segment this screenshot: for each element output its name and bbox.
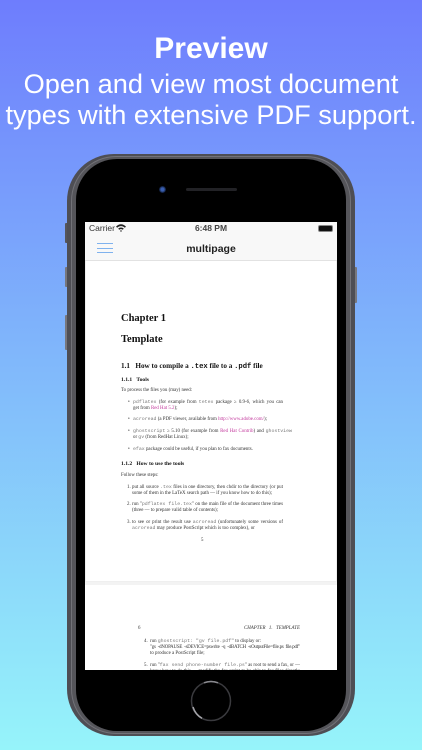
- tools intro: To process the files you (may) need:: [121, 388, 192, 393]
- steps list: to see or print the result use acroread (unfortunately some versions of: [132, 520, 283, 525]
- camera: [158, 186, 166, 192]
- page gap: [85, 582, 337, 585]
- time: 6:48 PM: [195, 223, 227, 233]
- tools list: •: [128, 447, 130, 452]
- icon: battery: [318, 225, 333, 232]
- steps continued: 5.: [144, 662, 148, 668]
- steps list: [127, 484, 283, 531]
- steps list: put all source .tex files in one directory, then chdir to the directory (or put: [132, 485, 283, 490]
- title: Preview: Preview: [154, 32, 268, 65]
- steps continued: 4.: [144, 638, 148, 644]
- tools list: get from Red Hat 5.2);: [133, 406, 177, 411]
- steps list: (three — to prepare valid table of contents);: [132, 508, 218, 513]
- tools list: or gv (from RedHat Linux);: [133, 435, 189, 440]
- section 1.1.2 heading: 1.1.2 How to use the tools: [121, 461, 184, 467]
- black bezel: [76, 159, 346, 731]
- steps list: 1.: [127, 485, 131, 490]
- tools list: efax package could be useful, if you plan to fax documents.: [133, 447, 253, 452]
- tools list: pdflatex (for example from tetex package ≥ 0.9-6, which you can: [133, 400, 283, 405]
- steps list: run "pdflatex file.tex" on the main file of the document three times: [132, 502, 283, 507]
- tools list: ghostscript ≥ 5.10 (for example from Red Hat Contrib) and ghostview: [133, 429, 292, 434]
- section 1.1 heading: 1.1 How to compile a .tex file to a .pdf file: [121, 362, 263, 371]
- template heading: Template: [121, 334, 163, 345]
- subtitle text: Open and view most document: [24, 68, 398, 99]
- chapter heading: Chapter 1: [121, 313, 166, 324]
- section 1.1.1 heading: 1.1.1 Tools: [121, 377, 149, 383]
- running header: CHAPTER 1. TEMPLATE: [244, 626, 300, 630]
- tools list: •: [128, 400, 130, 405]
- nav title: multipage: [186, 242, 236, 254]
- document page 1: [85, 260, 337, 582]
- home button: [190, 680, 232, 722]
- tools list: [128, 399, 292, 452]
- lower volume button: [65, 315, 69, 350]
- speaker: [186, 188, 237, 191]
- icon: wifi: [116, 224, 126, 232]
- left side buttons: [65, 223, 69, 243]
- steps list: some of them in the LaTeX search path — if you know how to do this);: [132, 491, 272, 496]
- tools list: acroread (a PDF viewer, available from http://www.adobe.com/);: [133, 417, 267, 422]
- status bar: [85, 222, 337, 237]
- steps list: 2.: [127, 502, 131, 507]
- page number 6: 6: [138, 626, 140, 630]
- tools list: •: [128, 417, 130, 422]
- steps list: acroread may produce PostScript which is too complex), or: [132, 526, 255, 531]
- steps continued: "gs -dNOPAUSE -sDEVICE=pswrite -q -dBATCH -sOutputFile=file.ps file.pdf": [150, 644, 300, 650]
- frame inner band: [72, 157, 350, 733]
- steps intro: Follow these steps:: [121, 473, 158, 478]
- steps list: 3.: [127, 520, 131, 525]
- page number 5: 5: [201, 538, 203, 543]
- subtitle text: [5, 68, 416, 130]
- tools list: •: [128, 429, 130, 434]
- icon: hamburger menu: [97, 243, 113, 253]
- frame highlight: [71, 156, 351, 734]
- navigation bar: [85, 236, 337, 260]
- document page 2: [85, 586, 337, 670]
- phone body: [67, 154, 355, 736]
- phone mockup: [65, 154, 357, 736]
- carrier: Carrier: [89, 223, 115, 233]
- right side button: [353, 267, 357, 303]
- screen: [85, 222, 337, 670]
- steps continued: to produce a PostScript file;: [150, 650, 205, 656]
- steps continued: [144, 638, 300, 670]
- steps continued: run ghostscript: "gv file.pdf" to display or:: [150, 638, 261, 644]
- subtitle text: types with extensive PDF support.: [5, 98, 416, 130]
